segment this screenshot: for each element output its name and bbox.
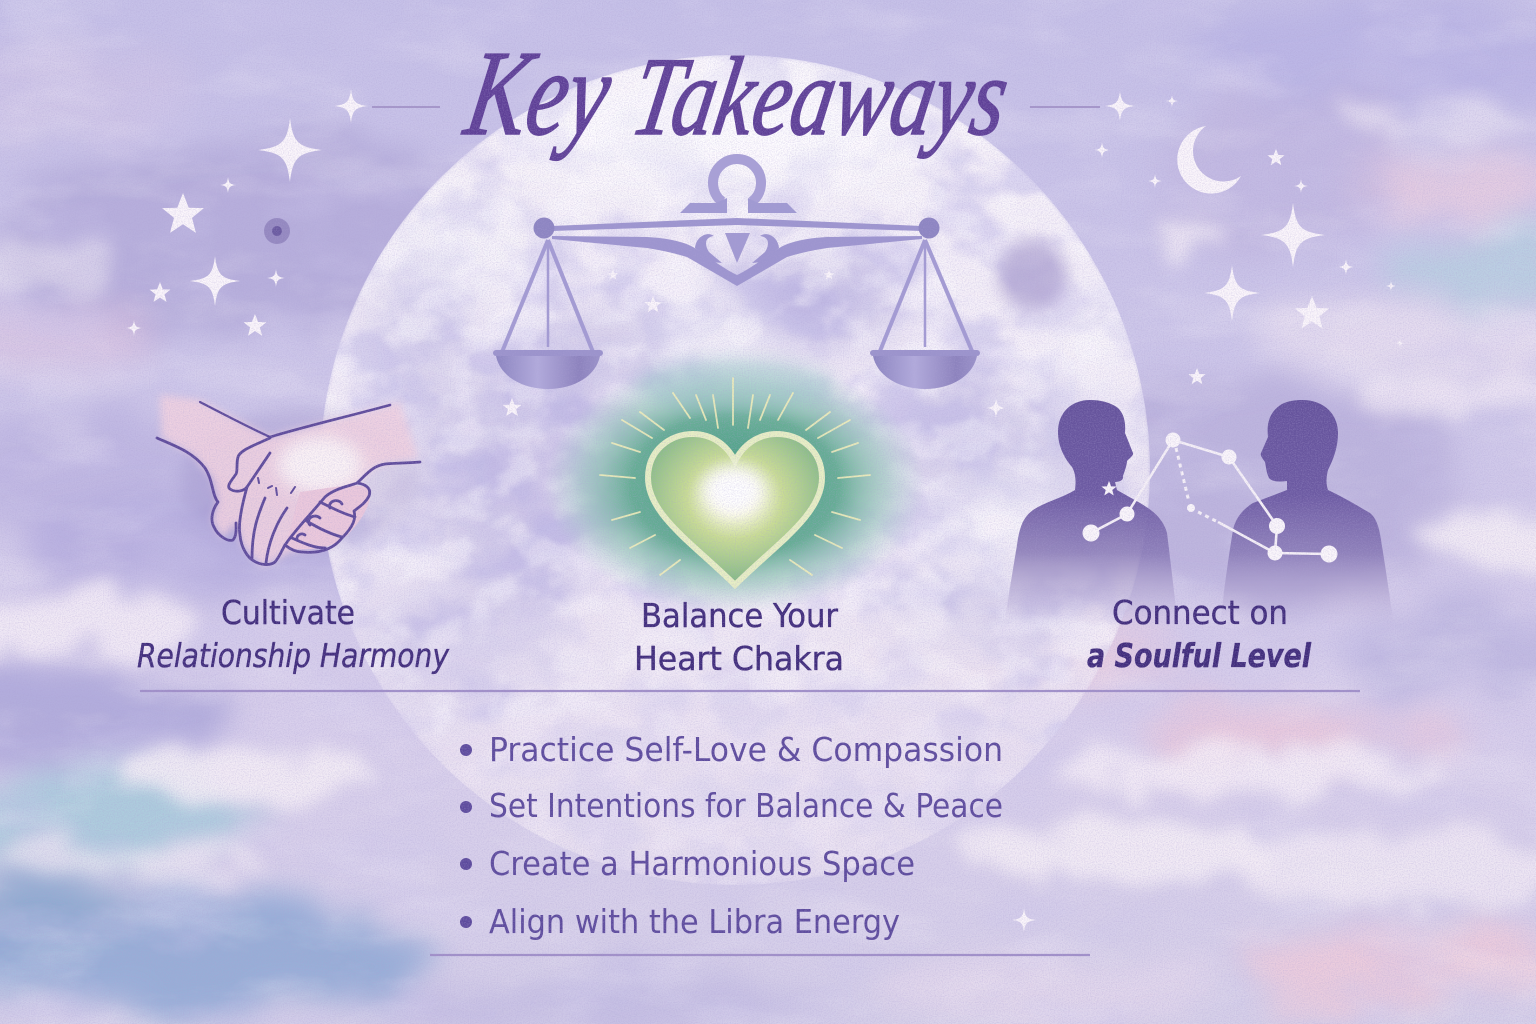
label: connect on a soulful level: Connect on (1112, 593, 1288, 632)
title: Takeaways (624, 35, 1017, 159)
icon: glowing heart chakra (545, 357, 925, 613)
title flourish right (1030, 106, 1100, 108)
beam (552, 218, 922, 231)
label: balance your heart chakra: Heart Chakra (634, 639, 844, 678)
bullet 3: Create a Harmonious Space (489, 844, 915, 883)
moon (320, 55, 1150, 885)
label: cultivate relationship harmony: Cultivate (221, 593, 355, 632)
icon: libra scales (493, 159, 980, 389)
bullet 4: Align with the Libra Energy (489, 902, 900, 941)
title flourish left (372, 106, 440, 108)
clouds (0, 104, 1536, 906)
label: balance your heart chakra (634, 596, 844, 678)
rays (600, 378, 870, 575)
icon: silhouettes with constellation (1004, 400, 1394, 625)
stars: moon surface (502, 270, 1036, 932)
label: connect on a soulful level: a Soulful Level (1087, 636, 1312, 675)
stars: upper right (1094, 91, 1404, 384)
icon: holding hands (157, 395, 420, 566)
libra glyph (680, 159, 797, 213)
icon: small planet (264, 218, 290, 244)
left silhouette (1004, 400, 1178, 625)
stars: upper left (126, 89, 368, 336)
bullet 1: Practice Self-Love & Compassion (489, 730, 1003, 769)
icon: crescent moon (1177, 126, 1241, 194)
constellation (1082, 432, 1338, 562)
bullet 2: Set Intentions for Balance & Peace (489, 786, 1003, 825)
label: cultivate relationship harmony (137, 593, 449, 675)
label: cultivate relationship harmony: Relationship Harmony (137, 636, 449, 675)
right silhouette (1220, 400, 1394, 625)
title (372, 25, 1017, 161)
label: connect on a soulful level (1087, 593, 1312, 675)
title: Key (456, 25, 622, 161)
left pan (493, 240, 603, 389)
right pan (870, 240, 980, 389)
label: balance your heart chakra: Balance Your (641, 596, 839, 635)
heart (648, 434, 822, 585)
beam ends (534, 218, 554, 238)
bullet list (460, 730, 1003, 941)
